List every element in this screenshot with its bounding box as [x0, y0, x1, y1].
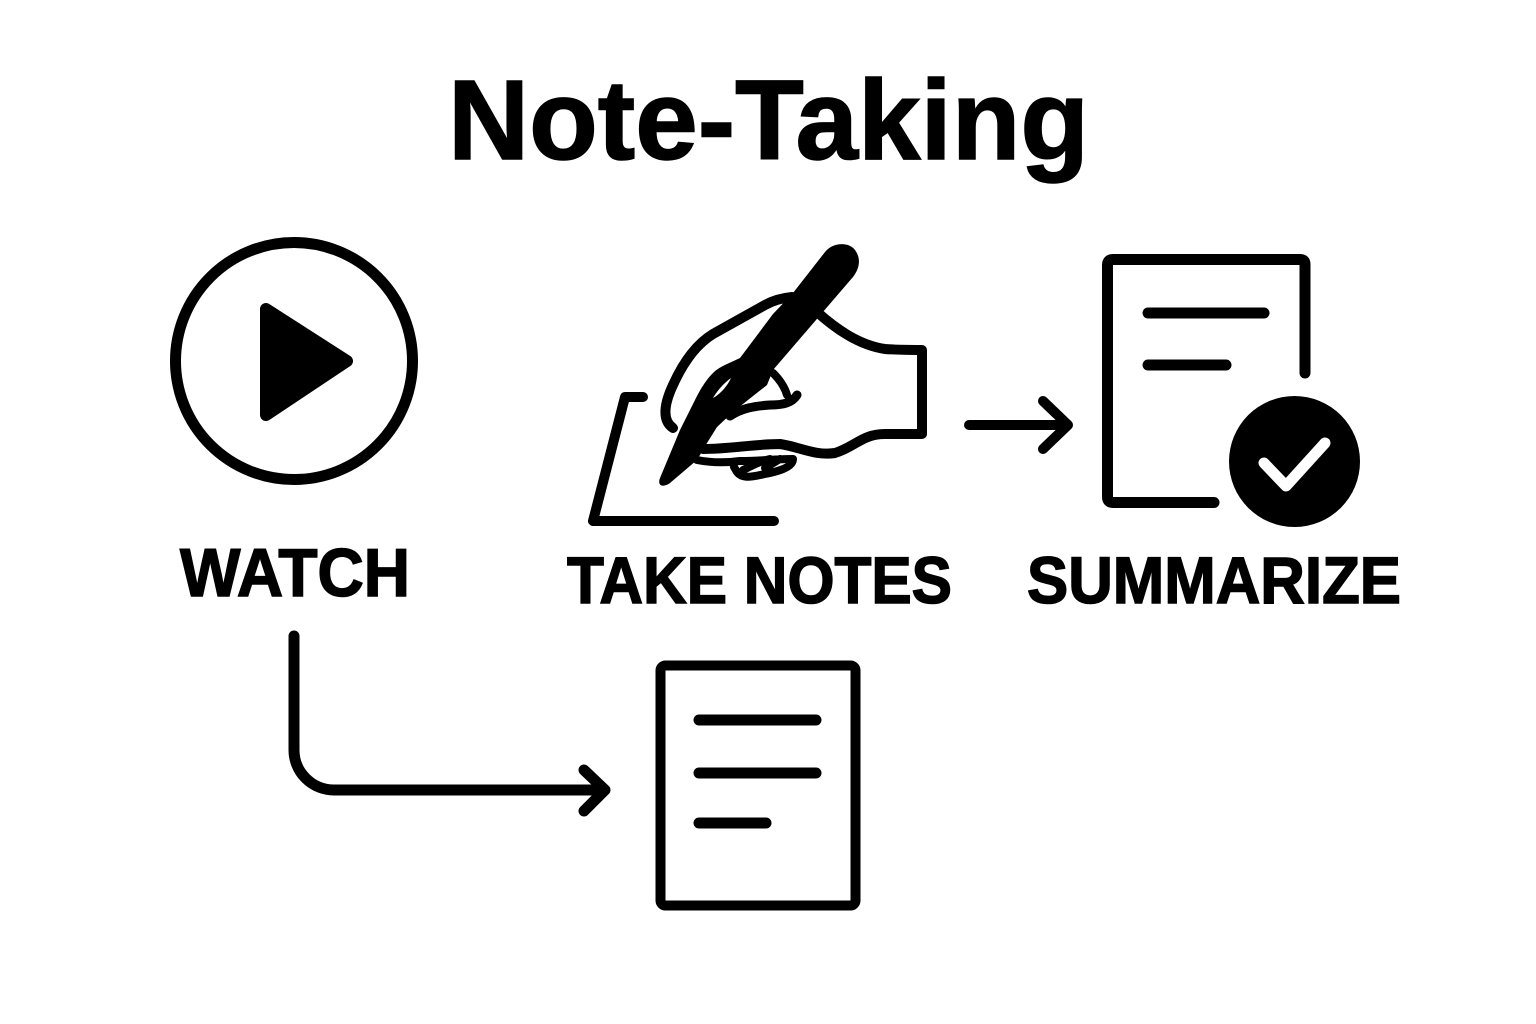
index finger [773, 373, 787, 395]
label: summarize: SUMMARIZE [1027, 543, 1401, 617]
icon: hand writing with pen [593, 244, 922, 521]
back of hand [703, 312, 922, 454]
paper outline [593, 397, 774, 521]
pen [659, 244, 859, 486]
curled fingers [697, 459, 793, 477]
hand outline [665, 297, 792, 428]
label: watch: WATCH [180, 535, 410, 611]
title: Note-Taking [448, 57, 1089, 183]
icon: notes document [660, 666, 856, 906]
icon: play button [176, 242, 412, 480]
check badge [1229, 396, 1360, 527]
label: take notes: TAKE NOTES [567, 543, 952, 617]
arrow: notes to summary [969, 401, 1068, 449]
arrow: watch to document [294, 636, 605, 811]
icon: summary document with check [1108, 260, 1360, 527]
